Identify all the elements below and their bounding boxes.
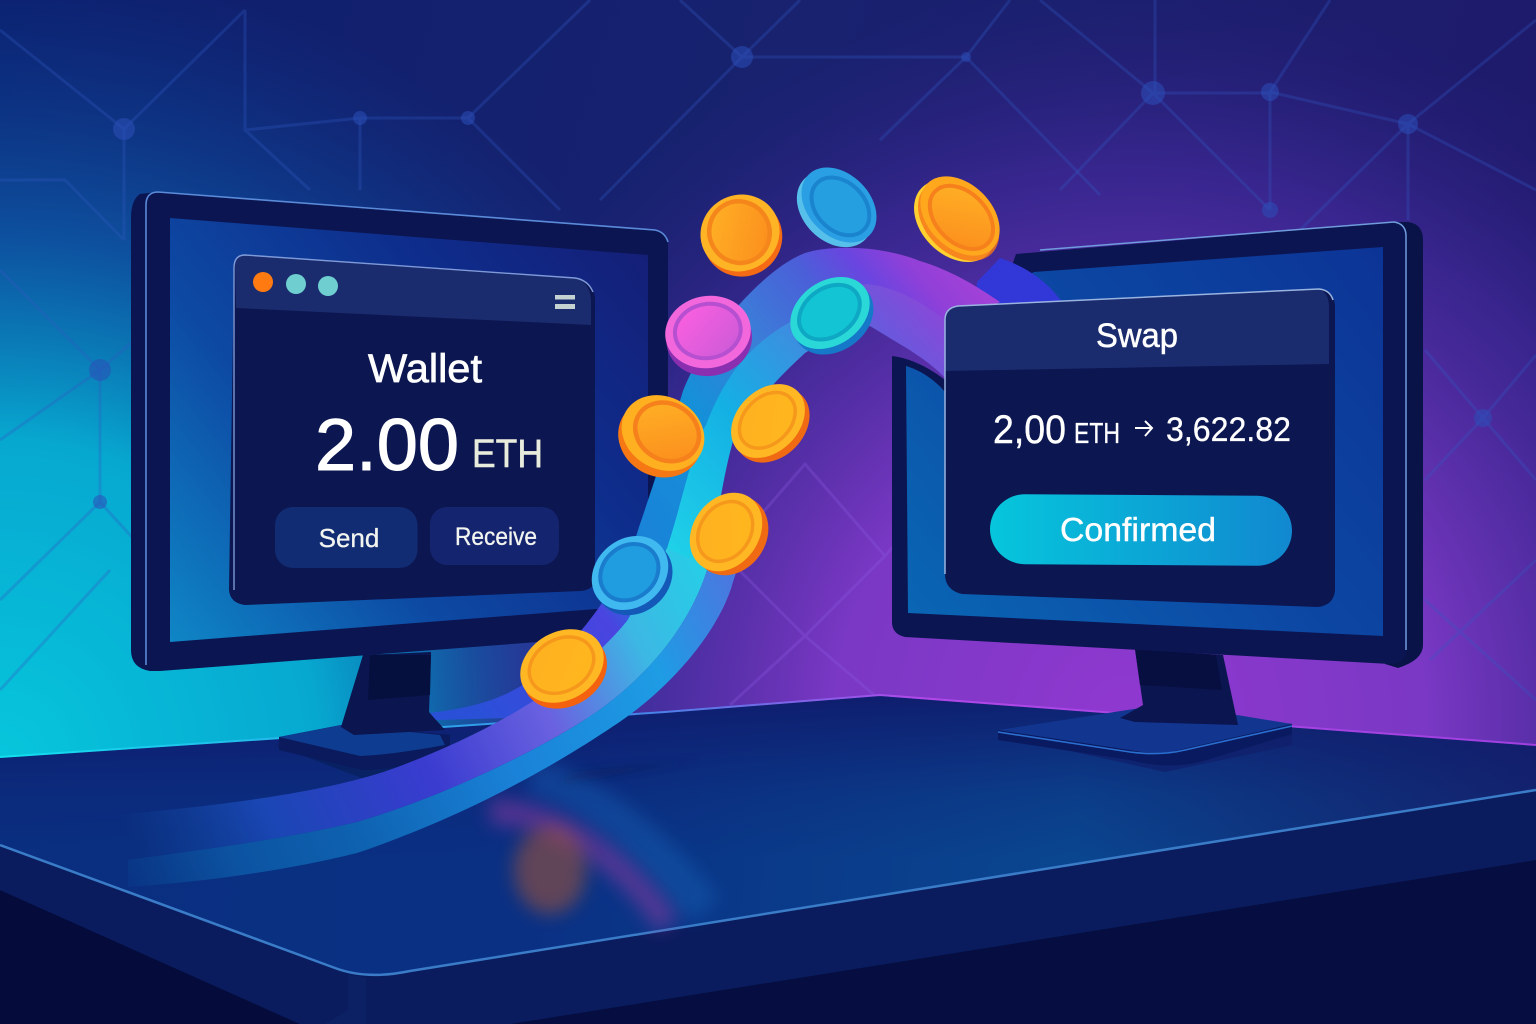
left monitor (131, 192, 668, 671)
coin: orange top right (898, 160, 1017, 280)
coin: blue lower (577, 521, 688, 631)
window dot: teal (286, 274, 306, 294)
confirmed button: Confirmed (1060, 511, 1216, 548)
left monitor stand (275, 652, 460, 778)
coin: yellow middle right (716, 369, 825, 478)
wallet window body (229, 255, 595, 605)
table reflection: coin and stream (490, 775, 705, 925)
stream band: cyan to purple (625, 284, 945, 640)
coin: yellow bottom (507, 615, 621, 724)
receive button (430, 507, 559, 565)
receive button: Receive (455, 523, 537, 551)
coin: blue top (782, 153, 891, 262)
send button (275, 507, 418, 568)
coin: pink (659, 289, 758, 383)
left monitor bezel (131, 192, 668, 671)
stream band: lower outer blue (128, 545, 745, 887)
wallet window title bar (235, 255, 591, 325)
swap window title bar (945, 289, 1329, 371)
swap currency: ETH (1074, 418, 1120, 450)
send button: Send (319, 523, 379, 553)
confirmed button (990, 494, 1292, 566)
menu icon (555, 295, 575, 309)
wallet heading: Wallet (368, 347, 482, 391)
stream band: lower purple (40, 548, 708, 860)
left monitor screen (170, 218, 648, 642)
window dot: teal (318, 276, 338, 296)
arrow icon (1135, 421, 1152, 436)
right monitor screen (906, 247, 1383, 636)
stream band: blue to purple (430, 248, 1000, 720)
swap amount: 2,00 (993, 408, 1066, 452)
table (0, 695, 1536, 1024)
background network of nodes (0, 0, 1536, 705)
swap result: 3,622.82 (1166, 411, 1291, 449)
right monitor (892, 222, 1423, 668)
swap heading: Swap (1096, 317, 1178, 355)
right monitor back (1385, 222, 1423, 668)
right monitor stand (998, 649, 1292, 772)
coin: yellow lower right (675, 479, 784, 590)
wallet currency: ETH (472, 432, 543, 476)
coin: orange top left (686, 180, 797, 291)
wallet window (229, 255, 595, 605)
stream wedge over right monitor (975, 258, 1062, 306)
right monitor bezel (892, 222, 1406, 664)
transfer stream (40, 248, 1062, 887)
swap window body (945, 289, 1335, 607)
wallet balance: 2.00 (315, 405, 459, 486)
coin: orange middle left (604, 380, 718, 493)
window dot: orange (253, 272, 273, 292)
coin: teal (776, 262, 888, 370)
swap window (945, 289, 1335, 607)
left monitor highlight edge (146, 192, 668, 665)
